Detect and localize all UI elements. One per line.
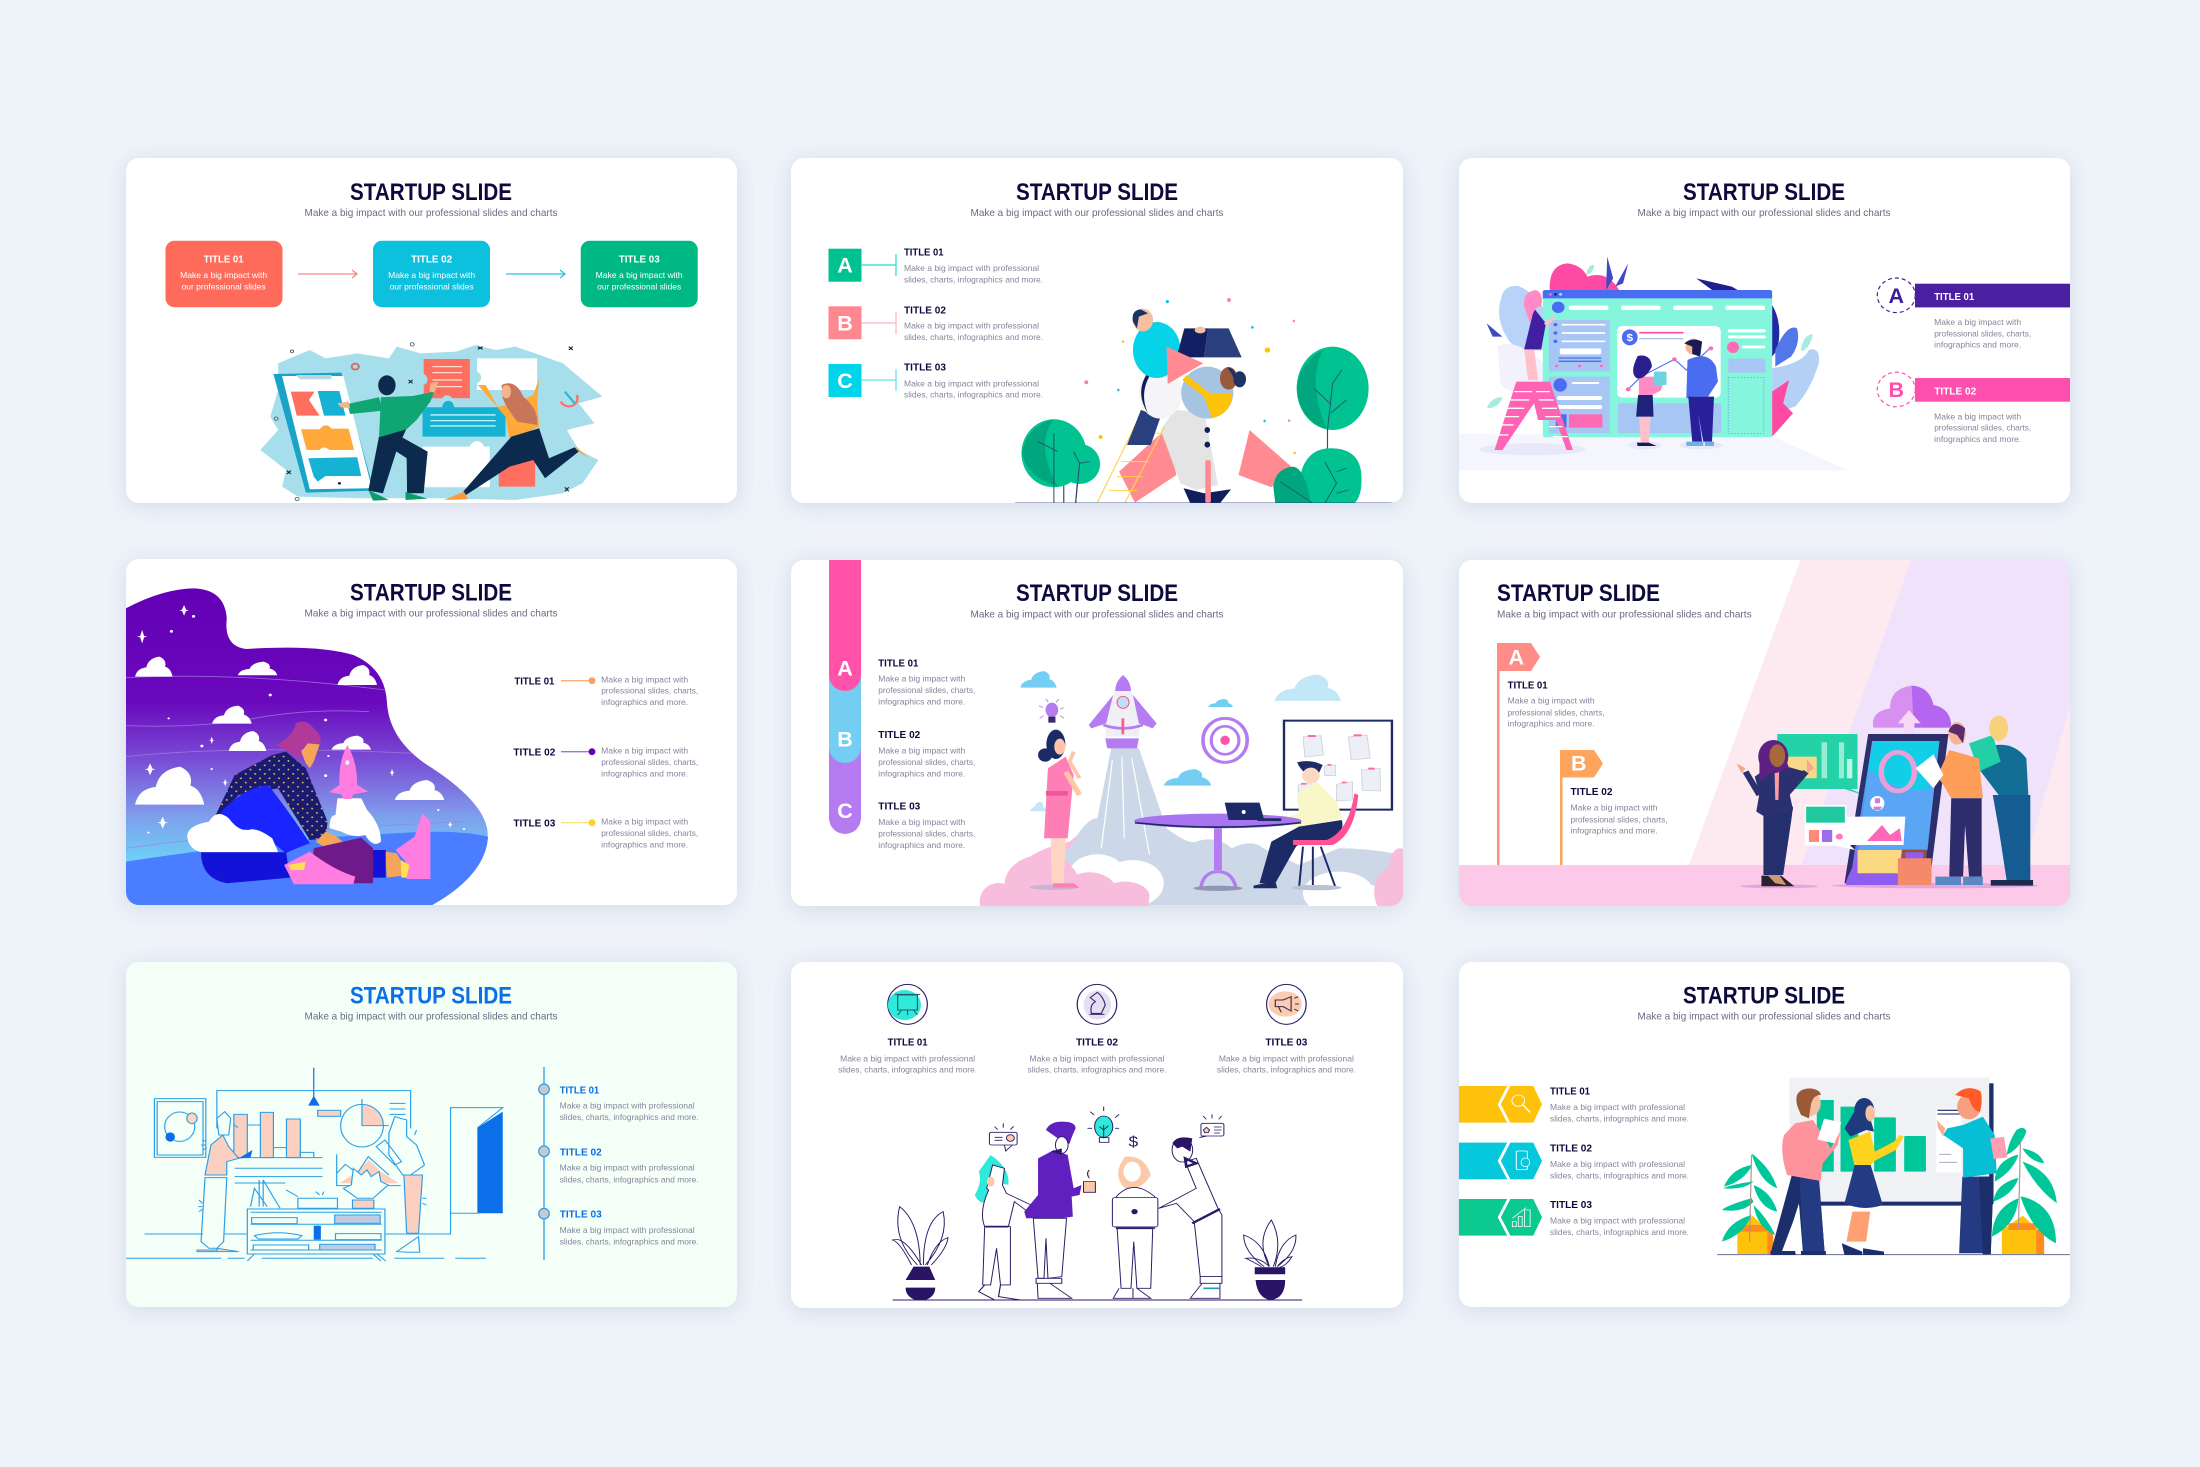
vertical ABC tabs: C: [837, 799, 853, 823]
item A: TITLE 01: [904, 247, 944, 259]
column: title 02: slides, charts, infographics and more.: [1028, 1065, 1166, 1075]
item B: B: [1889, 378, 1904, 402]
item: title 03: infographics and more.: [878, 840, 965, 850]
illustration: team with plants: $: [1129, 1134, 1138, 1150]
item: title 03: TITLE 03: [513, 818, 556, 830]
vertical ABC tabs: [829, 560, 861, 834]
subtitle: Make a big impact with our professional slides and charts: [1497, 609, 1752, 621]
item A: slides, charts, infographics and more.: [904, 274, 1043, 284]
item: title 02: [513, 745, 698, 778]
timeline with three items: TITLE 02: [560, 1146, 602, 1158]
subtitle: Make a big impact with our professional slides and charts: [970, 207, 1224, 219]
item: title 01: [878, 657, 975, 707]
item: title 03: infographics and more.: [601, 839, 688, 849]
flag item B: Make a big impact with: [1570, 803, 1658, 813]
title: STARTUP SLIDE: [350, 580, 512, 607]
box: title 01: TITLE 01: [204, 254, 244, 266]
column: title 01: Make a big impact with professional: [840, 1053, 975, 1063]
subtitle: Make a big impact with our professional slides and charts: [304, 1010, 558, 1022]
column: title 01: [838, 984, 977, 1075]
item A: [828, 247, 1043, 284]
illustration: dashboard team: [1459, 257, 1848, 471]
hexagon item 01: Make a big impact with professional: [1550, 1102, 1685, 1112]
illustration: people building rocket: [1015, 298, 1394, 503]
subtitle: Make a big impact with our professional slides and charts: [304, 608, 558, 620]
timeline with three items: TITLE 01: [560, 1084, 599, 1096]
item B: TITLE 02: [904, 304, 946, 316]
item: title 02: infographics and more.: [878, 768, 965, 778]
column: title 03: TITLE 03: [1265, 1037, 1308, 1049]
item: title 03: professional slides, charts,: [878, 828, 975, 838]
item: title 01: professional slides, charts,: [878, 685, 975, 695]
column: title 03: Make a big impact with professional: [1219, 1053, 1354, 1063]
item B: slides, charts, infographics and more.: [904, 332, 1043, 342]
box: title 01: Make a big impact with: [180, 270, 267, 280]
panel: slide 1 process boxes: [126, 158, 737, 503]
item: title 01: Make a big impact with: [878, 674, 966, 684]
panel: slide 2 ABC list with rocket: [791, 158, 1403, 503]
subtitle: Make a big impact with our professional slides and charts: [1638, 207, 1890, 219]
column: title 03: [1217, 984, 1356, 1075]
illustration: line art office: [126, 1068, 503, 1261]
item: title 02: professional slides, charts,: [601, 757, 698, 767]
panel: slide 4 night sky with rocket: [126, 559, 737, 905]
box: title 03: [581, 241, 698, 307]
column: title 02: TITLE 02: [1076, 1037, 1118, 1049]
box: title 03: our professional slides: [597, 282, 681, 292]
illustration: puzzle team: [260, 343, 602, 501]
timeline with three items: slides, charts, infographics and more.: [560, 1237, 699, 1247]
flag item A: [1497, 643, 1605, 865]
timeline with three items: TITLE 03: [560, 1209, 602, 1221]
item A: TITLE 01: [1934, 291, 1974, 303]
title: STARTUP SLIDE: [1683, 179, 1845, 206]
item B: Make a big impact with: [1934, 411, 2022, 421]
column: title 02: Make a big impact with professional: [1030, 1053, 1165, 1063]
title: STARTUP SLIDE: [1497, 580, 1660, 607]
item B: [1877, 372, 2070, 444]
hexagon item 03: TITLE 03: [1550, 1199, 1592, 1211]
illustration: night sky person launching rocket: [126, 588, 488, 905]
item: title 02: infographics and more.: [601, 768, 688, 778]
item A: A: [1889, 284, 1904, 308]
item: title 02: TITLE 02: [513, 746, 556, 758]
flag item B: [1560, 750, 1668, 865]
column: title 02: [1028, 984, 1166, 1075]
item: title 02: Make a big impact with: [601, 745, 689, 755]
item: title 02: Make a big impact with: [878, 745, 966, 755]
timeline with three items: [539, 1067, 699, 1260]
flag item A: professional slides, charts,: [1508, 707, 1605, 717]
item B: infographics and more.: [1934, 434, 2021, 444]
timeline with three items: Make a big impact with professional: [560, 1100, 695, 1110]
flag item B: TITLE 02: [1570, 786, 1613, 798]
column: title 01: TITLE 01: [888, 1037, 928, 1049]
subtitle: Make a big impact with our professional slides and charts: [1638, 1010, 1890, 1022]
arrow: 02 to 03: [506, 270, 565, 278]
flag item B: professional slides, charts,: [1570, 814, 1668, 824]
illustration: dashboard team: $: [1626, 333, 1633, 344]
flag item A: Make a big impact with: [1508, 696, 1595, 706]
item: title 01: TITLE 01: [878, 657, 918, 669]
hexagon item 02: TITLE 02: [1550, 1142, 1592, 1154]
item: title 01: [514, 674, 698, 707]
timeline with three items: slides, charts, infographics and more.: [560, 1174, 699, 1184]
timeline with three items: Make a big impact with professional: [560, 1163, 695, 1173]
title: STARTUP SLIDE: [350, 179, 512, 206]
item C: Make a big impact with professional: [904, 378, 1039, 388]
arrow: 01 to 02: [298, 270, 357, 278]
illustration: colored background and team: [1455, 558, 2076, 908]
flag item A: TITLE 01: [1508, 679, 1548, 691]
item C: slides, charts, infographics and more.: [904, 390, 1043, 400]
flag item A: A: [1509, 646, 1524, 670]
panel: slide 8 three icons and team: [791, 962, 1403, 1308]
box: title 03: Make a big impact with: [596, 270, 683, 280]
panel: slide 3 web dashboard: [1459, 158, 2070, 503]
item: title 03: [878, 800, 975, 850]
item B: B: [837, 312, 853, 336]
hexagon item 01: [1459, 1086, 1689, 1124]
column: title 03: slides, charts, infographics and more.: [1217, 1065, 1356, 1075]
item A: professional slides, charts,: [1934, 328, 2031, 338]
panel: slide 5 rocket office: [791, 560, 1412, 920]
item B: [828, 304, 1043, 342]
box: title 02: [373, 241, 490, 307]
vertical ABC tabs: B: [837, 728, 853, 752]
hexagon item 01: slides, charts, infographics and more.: [1550, 1114, 1689, 1124]
item: title 03: [513, 817, 698, 849]
item C: C: [837, 369, 853, 393]
item: title 01: infographics and more.: [878, 697, 965, 707]
item: title 01: TITLE 01: [514, 675, 555, 687]
hexagon item 02: slides, charts, infographics and more.: [1550, 1170, 1689, 1180]
box: title 02: our professional slides: [390, 282, 474, 292]
timeline with three items: Make a big impact with professional: [560, 1225, 695, 1235]
hexagon item 03: [1459, 1199, 1689, 1237]
item B: professional slides, charts,: [1934, 423, 2031, 433]
item: title 01: infographics and more.: [601, 697, 688, 707]
subtitle: Make a big impact with our professional slides and charts: [970, 609, 1224, 621]
hexagon item 01: TITLE 01: [1550, 1086, 1590, 1098]
panel: slide 9 hexagon list and board: [1459, 962, 2070, 1307]
item A: [1877, 278, 2070, 350]
hexagon item 03: Make a big impact with professional: [1550, 1216, 1685, 1226]
title: STARTUP SLIDE: [1683, 983, 1845, 1010]
box: title 01: our professional slides: [182, 282, 266, 292]
box: title 01: [166, 241, 282, 307]
item: title 01: Make a big impact with: [601, 674, 689, 684]
flag item B: infographics and more.: [1570, 826, 1658, 836]
illustration: rocket launch office: [980, 671, 1412, 920]
hexagon item 02: Make a big impact with professional: [1550, 1159, 1685, 1169]
item B: TITLE 02: [1934, 385, 1976, 397]
item C: TITLE 03: [904, 362, 946, 374]
box: title 02: TITLE 02: [411, 254, 452, 266]
item A: infographics and more.: [1934, 340, 2021, 350]
item: title 02: [878, 729, 975, 778]
vertical ABC tabs: A: [837, 656, 853, 680]
illustration: team at chart board: [1717, 1078, 2070, 1255]
item: title 02: professional slides, charts,: [878, 757, 975, 767]
item A: Make a big impact with professional: [904, 263, 1039, 273]
item: title 02: TITLE 02: [878, 729, 920, 741]
title: STARTUP SLIDE: [1016, 580, 1178, 607]
column: title 01: slides, charts, infographics and more.: [838, 1065, 977, 1075]
item C: [828, 362, 1043, 400]
flag item B: B: [1571, 752, 1587, 776]
box: title 03: TITLE 03: [619, 254, 660, 266]
title: STARTUP SLIDE: [350, 983, 512, 1010]
item B: Make a big impact with professional: [904, 321, 1039, 331]
item: title 03: Make a big impact with: [601, 817, 689, 827]
item: title 03: professional slides, charts,: [601, 828, 698, 838]
flag item A: infographics and more.: [1508, 719, 1595, 729]
item A: A: [837, 254, 853, 278]
timeline with three items: slides, charts, infographics and more.: [560, 1112, 699, 1122]
panel: slide 7 line art office: [126, 962, 737, 1307]
item: title 03: Make a big impact with: [878, 817, 966, 827]
hexagon item 02: [1459, 1142, 1689, 1180]
illustration: team with plants: [893, 1107, 1302, 1300]
item A: Make a big impact with: [1934, 317, 2022, 327]
subtitle: Make a big impact with our professional slides and charts: [304, 207, 558, 219]
panel: slide 6 mobile app team: [1455, 558, 2076, 908]
item: title 03: TITLE 03: [878, 800, 920, 812]
title: STARTUP SLIDE: [1016, 179, 1178, 206]
hexagon item 03: slides, charts, infographics and more.: [1550, 1227, 1689, 1237]
box: title 02: Make a big impact with: [388, 270, 475, 280]
item: title 01: professional slides, charts,: [601, 686, 698, 696]
